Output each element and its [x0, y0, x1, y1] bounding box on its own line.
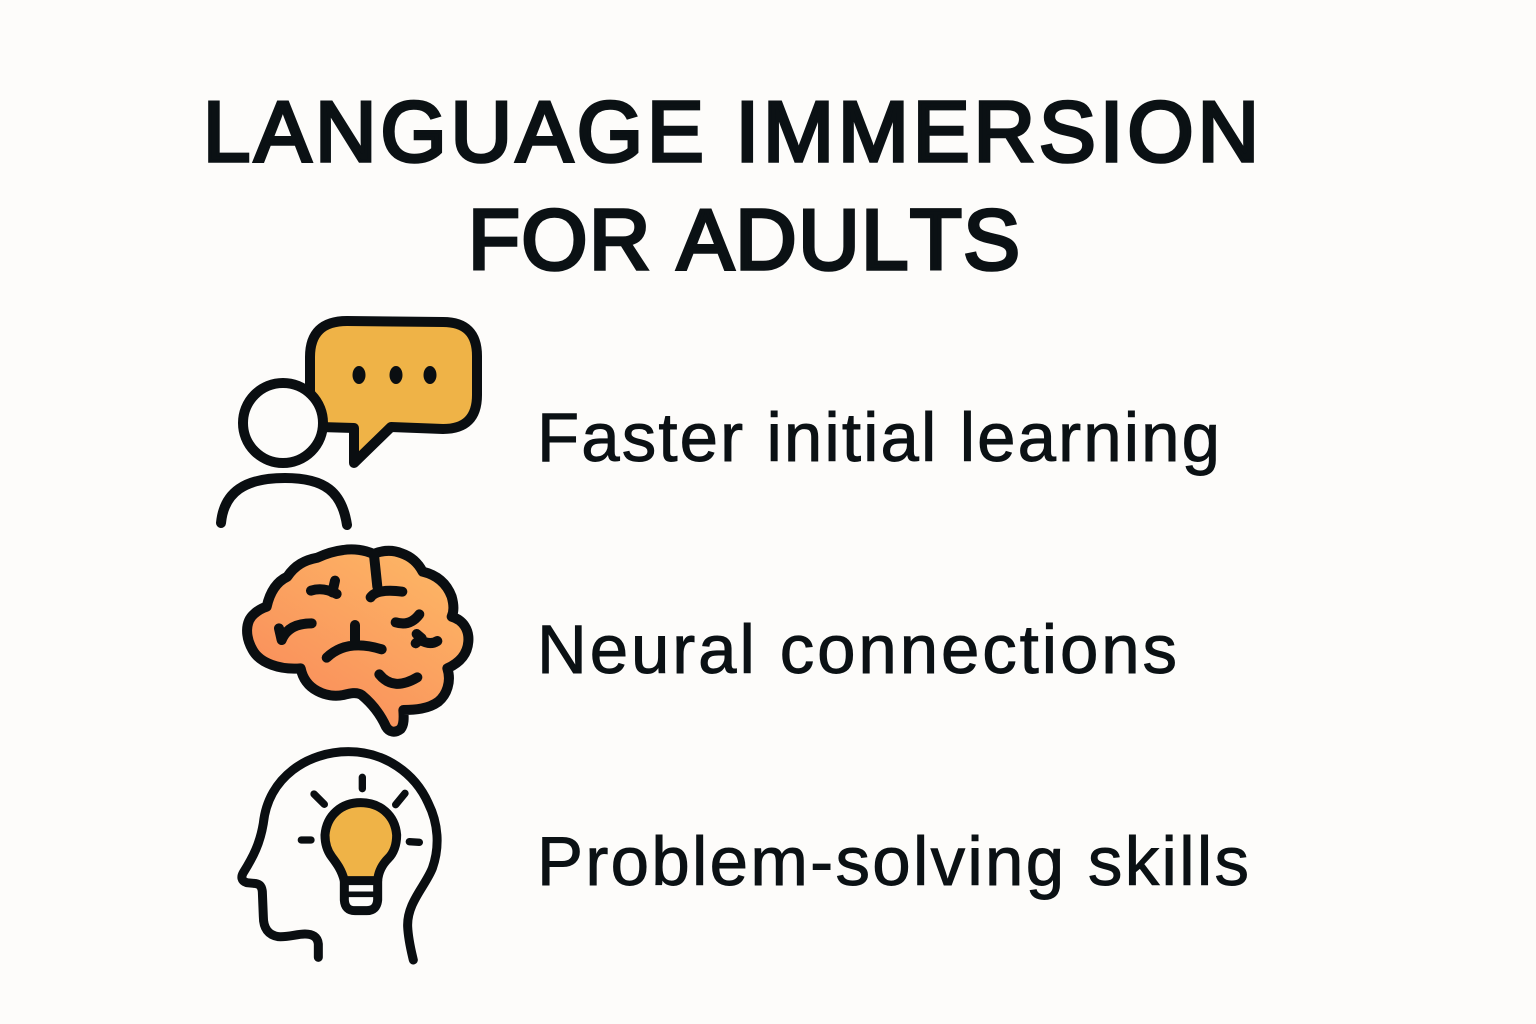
- title: FOR ADULTS: [468, 193, 1020, 288]
- text: problem-solving skills: Problem-solving skills: [537, 823, 1249, 900]
- text: faster initial learning: Faster initial learning: [537, 399, 1220, 476]
- title: LANGUAGE IMMERSION: [203, 85, 1259, 180]
- title: [203, 85, 1259, 288]
- icon: person with speech bubble: [221, 321, 477, 525]
- icon: head with light bulb: [242, 752, 437, 960]
- text: neural connections: Neural connections: [537, 611, 1177, 688]
- icon: brain: [247, 549, 468, 732]
